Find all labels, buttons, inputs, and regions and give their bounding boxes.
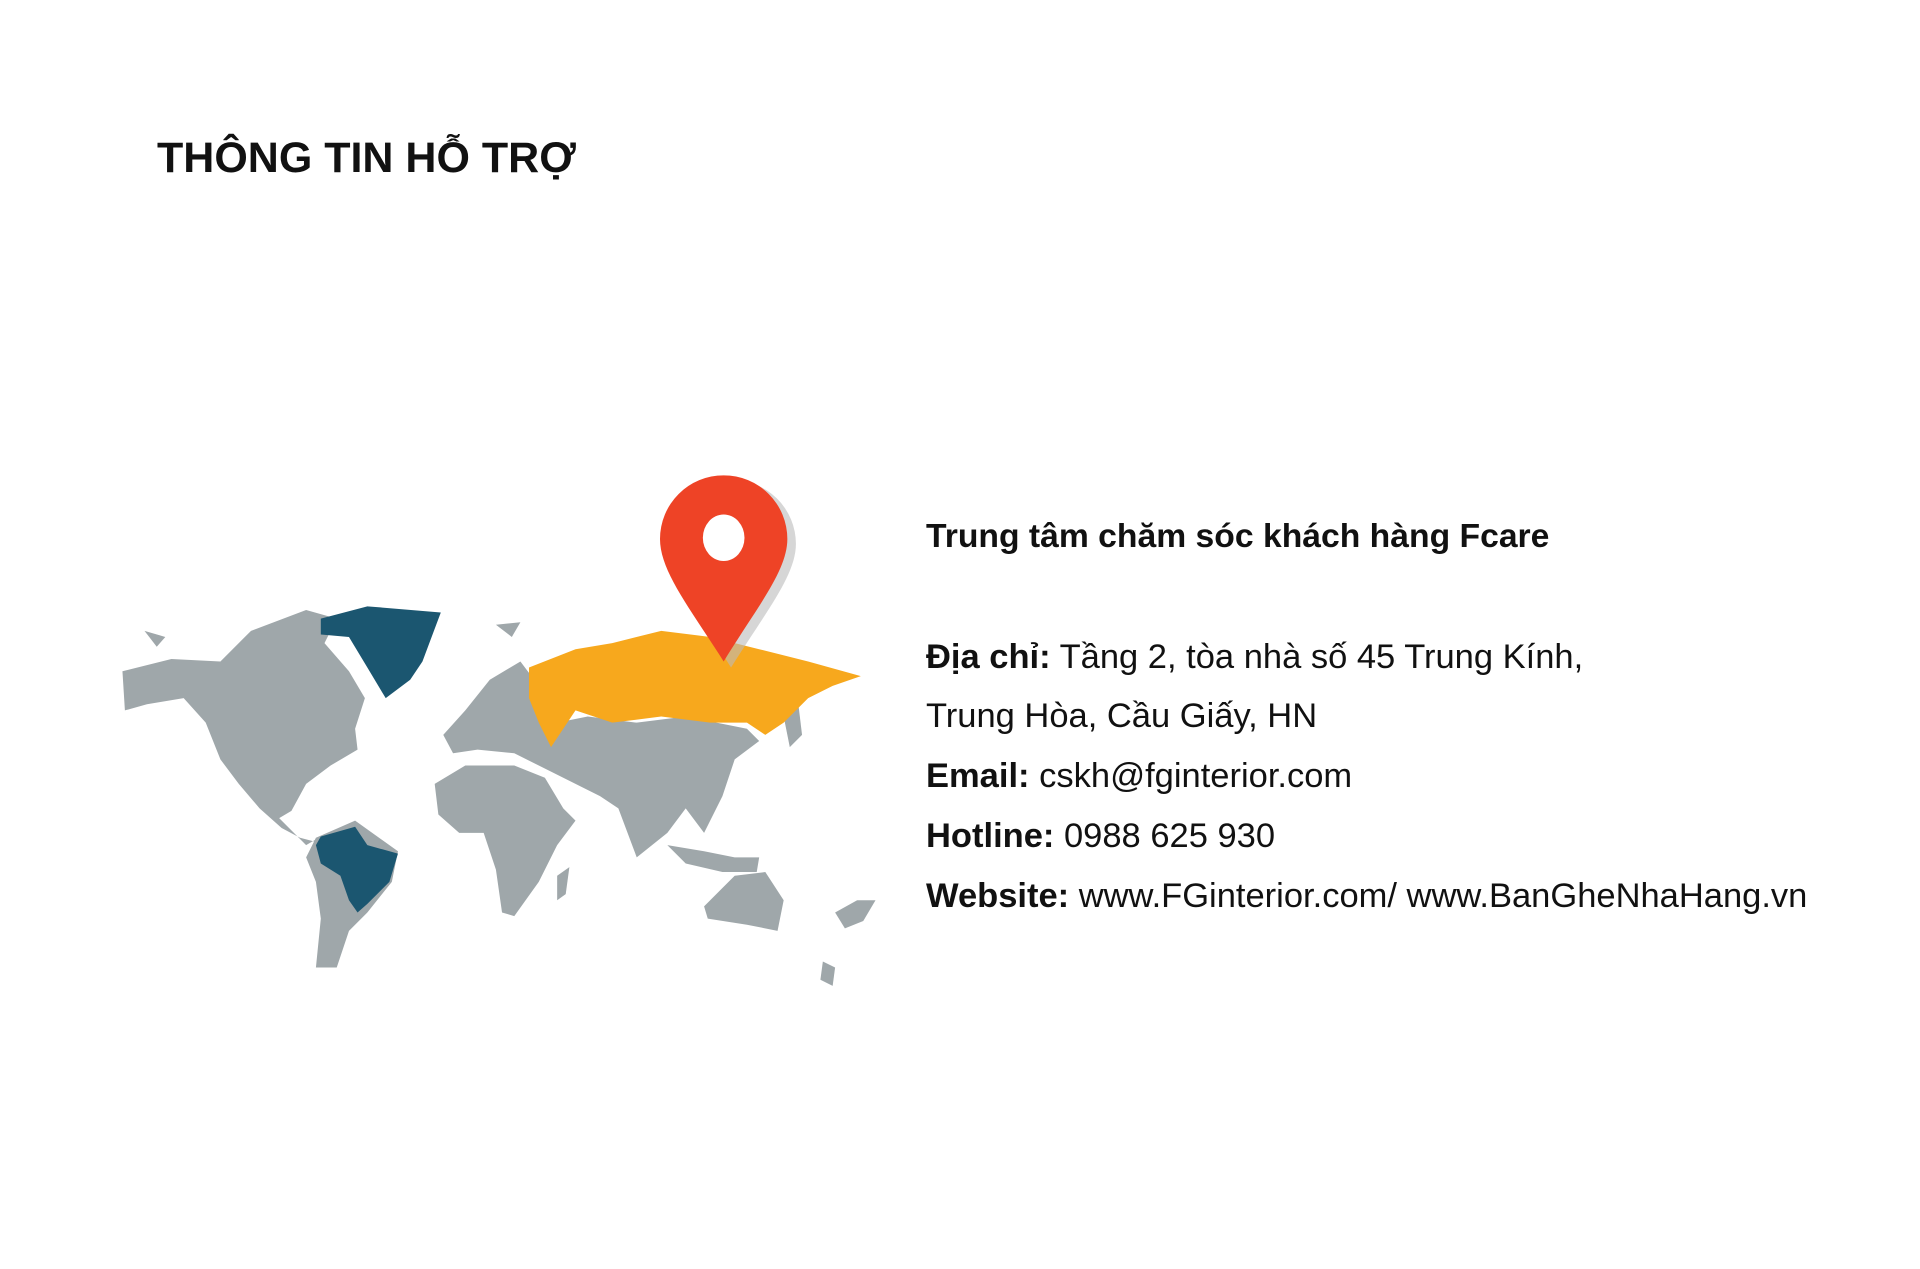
title: THÔNG TIN HỖ TRỢ (157, 134, 576, 182)
map: eurasia (443, 661, 759, 857)
map: africa (435, 766, 576, 916)
map: brazil (316, 827, 398, 912)
map: australia (704, 872, 784, 931)
text: address line 2: Trung Hòa, Cầu Giấy, HN (926, 697, 1317, 735)
icon: location pin (660, 475, 796, 668)
map: russia (529, 631, 861, 747)
text: website: Website: www.FGinterior.com/ www.BanGheNhaHang.vn (926, 877, 1807, 915)
text: email: Email: cskh@fginterior.com (926, 757, 1352, 795)
map: greenland (321, 606, 441, 698)
text: hotline: Hotline: 0988 625 930 (926, 817, 1275, 855)
text: address: Địa chỉ: Tầng 2, tòa nhà số 45 Trung Kính, (926, 638, 1583, 676)
map: north america (122, 610, 876, 986)
heading: customer care center: Trung tâm chăm sóc khách hàng Fcare (926, 517, 1549, 555)
map: asia islands (667, 845, 759, 872)
map: south america (306, 821, 398, 968)
